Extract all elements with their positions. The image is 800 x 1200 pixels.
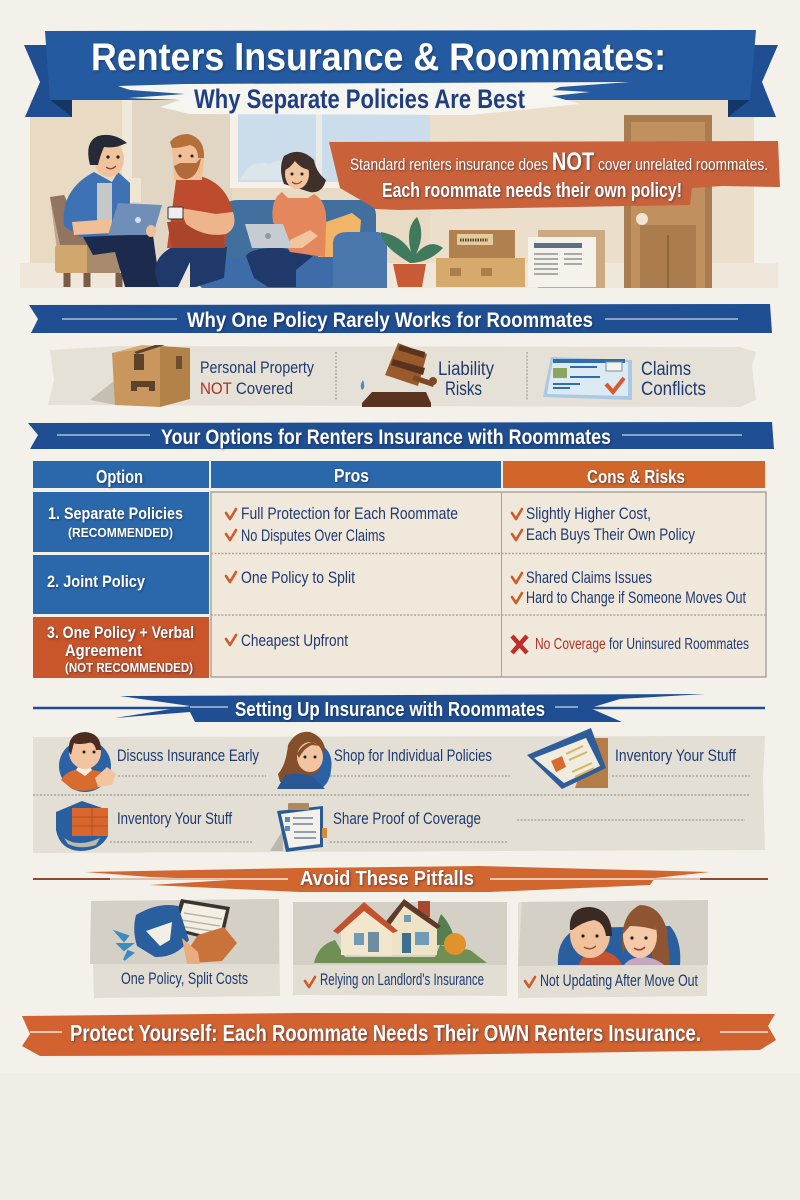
icon: houses bbox=[314, 899, 487, 963]
row 1 option: separate policies bbox=[33, 492, 209, 552]
section heading: your options: Your Options for Renters Insurance with Roommates bbox=[161, 426, 611, 449]
row 3 option: verbal agreement: (NOT RECOMMENDED) bbox=[65, 660, 193, 675]
hero illustration: roommates in living room bbox=[20, 100, 778, 288]
section heading: your options bbox=[28, 422, 774, 449]
section heading: setting up bbox=[33, 694, 765, 722]
pros column bbox=[226, 504, 458, 650]
title text: Renters Insurance & Roommates: bbox=[91, 36, 666, 79]
text: liability risks: Liability bbox=[438, 359, 494, 380]
section heading: setting up: Setting Up Insurance with Roommates bbox=[235, 699, 545, 721]
icon: gavel bbox=[361, 343, 437, 407]
row 1 option: separate policies: 1. Separate Policies bbox=[48, 504, 183, 523]
door bbox=[624, 115, 712, 288]
section heading: avoid pitfalls bbox=[33, 866, 768, 892]
text: shop policies: Shop for Individual Policies bbox=[334, 746, 492, 765]
subtitle text: Why Separate Policies Are Best bbox=[194, 84, 525, 114]
icon: man bbox=[59, 732, 116, 792]
pitfall card: one policy bbox=[90, 899, 280, 998]
callout line one: Standard renters insurance does NOT cover unrelated roommates. bbox=[350, 148, 768, 176]
panel: reasons one policy fails bbox=[48, 343, 756, 407]
sofa bbox=[200, 200, 387, 288]
row 1 option: separate policies: (RECOMMENDED) bbox=[68, 525, 173, 540]
text: not updating: Not Updating After Move Out bbox=[540, 971, 698, 990]
row 2 option: joint policy: 2. Joint Policy bbox=[47, 572, 145, 591]
section heading: why one policy bbox=[29, 304, 772, 333]
panel: setup steps bbox=[33, 728, 765, 853]
icon: clipboard bbox=[270, 803, 327, 852]
section heading: avoid pitfalls: Avoid These Pitfalls bbox=[300, 868, 474, 890]
table header row: Cons & Risks bbox=[587, 467, 685, 487]
text: not updating bbox=[525, 971, 698, 990]
pitfall card: landlord insurance bbox=[293, 899, 507, 996]
table body background bbox=[211, 492, 766, 677]
icon: inventory folder bbox=[56, 801, 108, 851]
person: man with credit card bbox=[155, 134, 234, 287]
pitfall card: not updating bbox=[518, 900, 708, 998]
icon: shield with paper and hand bbox=[116, 899, 237, 964]
icon: cardboard box bbox=[90, 345, 190, 407]
person: woman with laptop bbox=[245, 152, 326, 287]
icon: tablet bbox=[527, 728, 608, 789]
text: inventory: Inventory Your Stuff bbox=[615, 746, 736, 765]
callout: warning banner bbox=[329, 141, 780, 210]
icon: woman bbox=[277, 732, 332, 789]
text: personal property bbox=[200, 358, 314, 398]
closing banner bbox=[22, 1013, 776, 1056]
cons column: Slightly Higher Cost, bbox=[526, 504, 651, 523]
cons column: Each Buys Their Own Policy bbox=[526, 525, 695, 544]
cons column bbox=[512, 504, 749, 653]
text: personal property: Personal Property bbox=[200, 358, 314, 377]
pros column: Full Protection for Each Roommate bbox=[241, 504, 458, 523]
title ribbon bbox=[24, 30, 778, 117]
person: man with laptop bbox=[64, 135, 162, 287]
pros column: No Disputes Over Claims bbox=[241, 526, 385, 545]
text: relying on landlord bbox=[305, 970, 484, 989]
icon: claim form with check bbox=[543, 357, 632, 400]
text: claims conflicts: Conflicts bbox=[641, 379, 706, 400]
table header row: Option bbox=[96, 467, 143, 487]
text: discuss insurance: Discuss Insurance Early bbox=[117, 746, 259, 765]
table header row: Pros bbox=[334, 466, 369, 486]
text: liability risks: Risks bbox=[445, 379, 482, 400]
row 2 option: joint policy bbox=[33, 555, 209, 614]
icon: couple bbox=[558, 905, 680, 965]
row 3 option: verbal agreement bbox=[33, 617, 209, 678]
text: no coverage: No Coverage for Uninsured Roommates bbox=[535, 636, 749, 653]
window bbox=[230, 100, 430, 188]
text: claims conflicts: Claims bbox=[641, 359, 691, 380]
armchair bbox=[50, 195, 120, 287]
pros column: Cheapest Upfront bbox=[241, 631, 348, 650]
icon: red cross bbox=[512, 636, 527, 653]
cons column: Shared Claims Issues bbox=[526, 568, 652, 587]
options comparison table bbox=[33, 461, 766, 678]
text: inventory second: Inventory Your Stuff bbox=[117, 809, 232, 828]
text: personal property: NOT Covered bbox=[200, 379, 293, 398]
pros column: One Policy to Split bbox=[241, 568, 355, 587]
table header row bbox=[33, 461, 765, 488]
text: claims conflicts bbox=[641, 359, 706, 400]
text: liability risks bbox=[438, 359, 494, 400]
stack of documents bbox=[528, 230, 605, 288]
row 3 option: verbal agreement: Agreement bbox=[65, 641, 142, 660]
subtitle brush strip bbox=[118, 82, 630, 115]
section heading: why one policy: Why One Policy Rarely Works for Roommates bbox=[187, 309, 593, 332]
row 3 option: verbal agreement: 3. One Policy + Verbal bbox=[47, 623, 194, 642]
text: share proof: Share Proof of Coverage bbox=[333, 809, 481, 828]
plant bbox=[381, 217, 443, 287]
text: relying on landlord: Relying on Landlord's Insurance bbox=[320, 970, 484, 989]
moving boxes bbox=[436, 230, 525, 287]
text: one policy split costs: One Policy, Split Costs bbox=[121, 969, 248, 988]
callout line two: Each roommate needs their own policy! bbox=[382, 180, 682, 202]
